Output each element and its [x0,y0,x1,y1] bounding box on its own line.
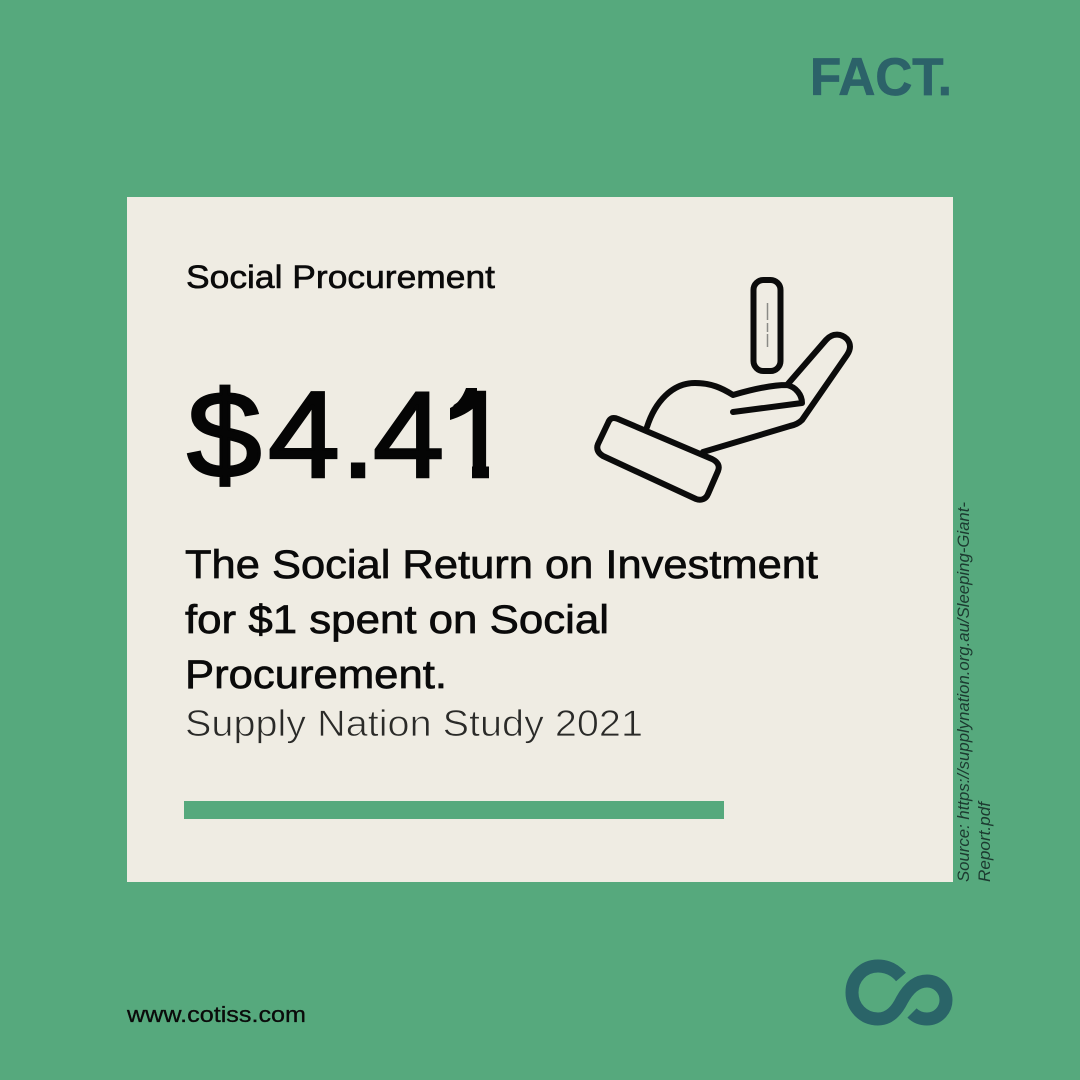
text: study citation: Supply Nation Study 2021 [185,703,643,744]
icon: hand with falling coin [597,280,850,500]
panel: main card [127,197,953,882]
progress bar [184,801,724,819]
heading: Social Procurement: Social Procurement [186,259,495,295]
text: website: www.cotiss.com [126,1002,306,1027]
icon: shirt cuff [597,418,719,500]
statistic: $4.41: 1 [443,367,511,504]
text: headline description [185,543,818,697]
text: rotated source: Source: https://supplynation.org.au/Sleeping-Giant- [954,502,973,882]
text: rotated source: Report.pdf [975,800,994,882]
statistic: $4.41: $ [187,367,262,504]
icon: Cotiss infinity logo [852,966,946,1019]
heading: FACT.: FACT. [810,48,952,107]
text: headline description: The Social Return on Investment [185,543,818,587]
text: rotated source [954,502,994,882]
icon: hand [647,335,850,452]
text: headline description: for $1 spent on Social [185,598,609,642]
statistic: $4.41: . [341,367,375,504]
statistic: $4.41 [187,365,516,504]
statistic: $4.41: 4 [373,365,444,503]
statistic: $4.41: 4 [268,366,340,503]
icon: coin [754,280,780,371]
text: headline description: Procurement. [185,653,447,697]
